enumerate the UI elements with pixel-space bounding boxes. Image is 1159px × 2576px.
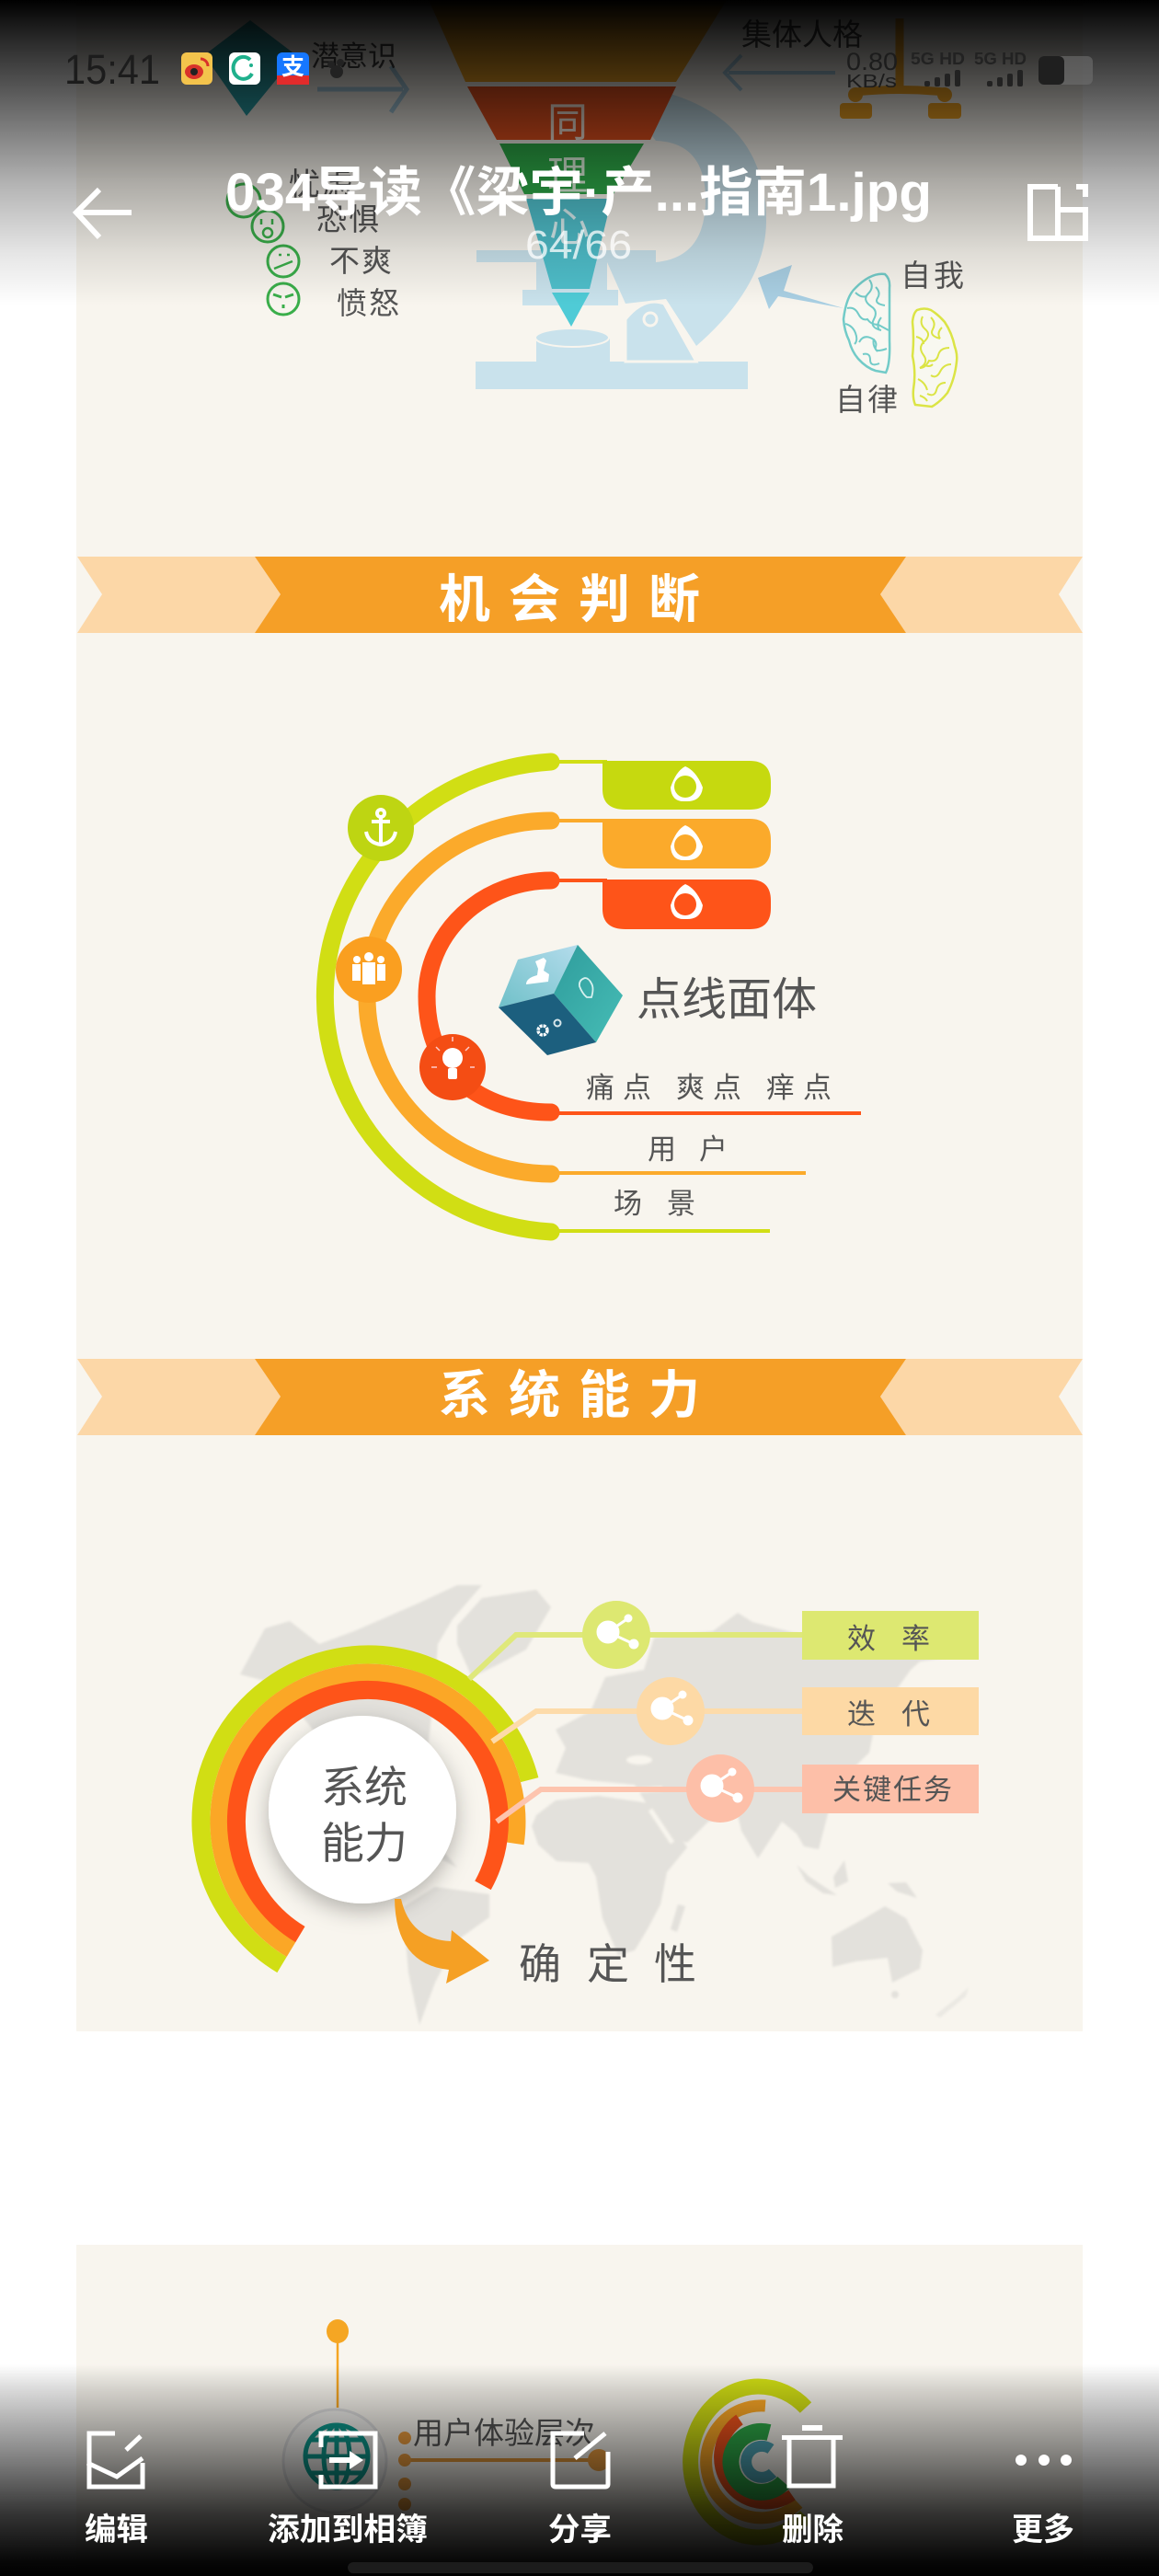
overlay: top shade: [0, 0, 1159, 305]
funnel: 同: [547, 100, 588, 145]
panel: upper poster background: [76, 0, 1083, 2031]
header: page counter: 64/66: [525, 223, 632, 268]
center circle: 系统能力: 系统: [321, 1763, 407, 1811]
map: world background: [240, 1585, 969, 2025]
icon: people: [352, 952, 385, 984]
diagram: self-discipline brains: 自律: [835, 383, 900, 417]
button: edit: [85, 2433, 148, 2547]
icon: weibo app: [181, 52, 212, 85]
button: delete: [782, 2425, 843, 2547]
status bar: [64, 46, 1093, 93]
diagram: user experience levels: 用户体验层次: [413, 2416, 595, 2450]
callout: 效率: [469, 1601, 979, 1679]
callout: 效率: 效率: [847, 1623, 930, 1655]
diagram: subconscious diamond: [204, 20, 407, 116]
arc: scene: [325, 761, 771, 1232]
list: emotions with faces: 恐惧: [316, 202, 381, 236]
clock: 15:41: [64, 46, 160, 93]
signal indicators: [911, 50, 1027, 86]
label: points lines planes: 点线面体: [637, 975, 817, 1025]
label: user: 用户: [648, 1133, 728, 1166]
button: add to album: [268, 2433, 428, 2547]
arc: user: [336, 819, 806, 1174]
center circle: 系统能力: 能力: [321, 1819, 407, 1868]
network speed: 0.80: [846, 48, 898, 75]
list: emotions with faces: 愤怒: [337, 286, 401, 320]
callout: 迭代: [492, 1677, 979, 1745]
home indicator: [348, 2562, 813, 2573]
funnel: 心: [549, 205, 590, 250]
label: scene: 场景: [614, 1188, 695, 1220]
funnel: 理: [547, 154, 588, 199]
diagram: collective personality: 集体人格: [741, 17, 863, 52]
banner: 机会判断: [77, 557, 1083, 633]
icon: battery: [1039, 56, 1093, 85]
icon: light bulb: [431, 1037, 475, 1079]
button: more: 更多: [1012, 2513, 1074, 2547]
list: emotions with faces: [227, 167, 401, 320]
arrow: to certainty: [395, 1899, 489, 1984]
arc: green ring: [201, 1655, 530, 1965]
panel: lower poster background: [76, 2245, 1083, 2576]
diagram: subconscious diamond: 潜意识: [311, 40, 396, 73]
diagram: self-discipline brains: 自我: [901, 259, 967, 293]
diagram: self-discipline brains: [758, 259, 967, 417]
button: edit: 编辑: [85, 2513, 148, 2547]
list: emotions with faces: 不爽: [329, 244, 394, 278]
signal indicators: 5G HD: [911, 50, 965, 68]
icon: back arrow: [76, 190, 132, 237]
signal indicators: 5G HD: [974, 50, 1027, 68]
header: file title: 034导读《梁宇·产...指南1.jpg: [225, 163, 932, 223]
list: emotions with faces: 忧虑: [289, 167, 355, 202]
network speed: [846, 48, 898, 92]
overlay: bottom shade: [0, 2364, 1159, 2576]
icon: cube: [499, 945, 623, 1055]
toolbar: [85, 2425, 1074, 2547]
chart: concentric opportunity arcs: [325, 761, 861, 1232]
button: share: 分享: [548, 2513, 612, 2547]
diagram: collective personality: [725, 17, 961, 119]
center circle: 系统能力: [269, 1716, 456, 1903]
callout: 关键任务: [497, 1754, 979, 1823]
notification icon: [327, 59, 344, 78]
button: add to album: 添加到相簿: [268, 2513, 428, 2547]
banner: 系统能力: [77, 1359, 1083, 1435]
callout: 迭代: 迭代: [847, 1698, 930, 1731]
chart: lower concentric rings: [691, 2386, 806, 2537]
button: more: [1012, 2455, 1074, 2547]
icon: alipay app: [277, 52, 309, 85]
diagram: user experience levels: [283, 2319, 610, 2513]
label: pain points: 痛点爽点痒点: [586, 1072, 832, 1104]
label: certainty: 确定性: [519, 1940, 696, 1988]
network speed: KB/s: [846, 72, 897, 92]
arc: pain points: [419, 880, 861, 1113]
microscope: [476, 87, 766, 389]
banner: 机会判断: 机会判断: [439, 570, 718, 628]
banner: 系统能力: 系统能力: [439, 1366, 718, 1424]
button: delete: 删除: [782, 2513, 843, 2547]
icon: detail panel: [1030, 187, 1085, 238]
arc: red ring: [236, 1690, 499, 1935]
icon: alipay app: 支: [281, 54, 304, 80]
icon: green app: [229, 52, 260, 85]
diagram: empathy funnel and microscope: [429, 0, 766, 389]
button: share: [548, 2433, 612, 2547]
chart: system capability rings: [201, 1601, 979, 1988]
arc: orange ring: [219, 1673, 517, 1949]
funnel: [429, 0, 727, 327]
callout: 关键任务: 关键任务: [832, 1774, 954, 1806]
icon: anchor: [366, 810, 396, 845]
